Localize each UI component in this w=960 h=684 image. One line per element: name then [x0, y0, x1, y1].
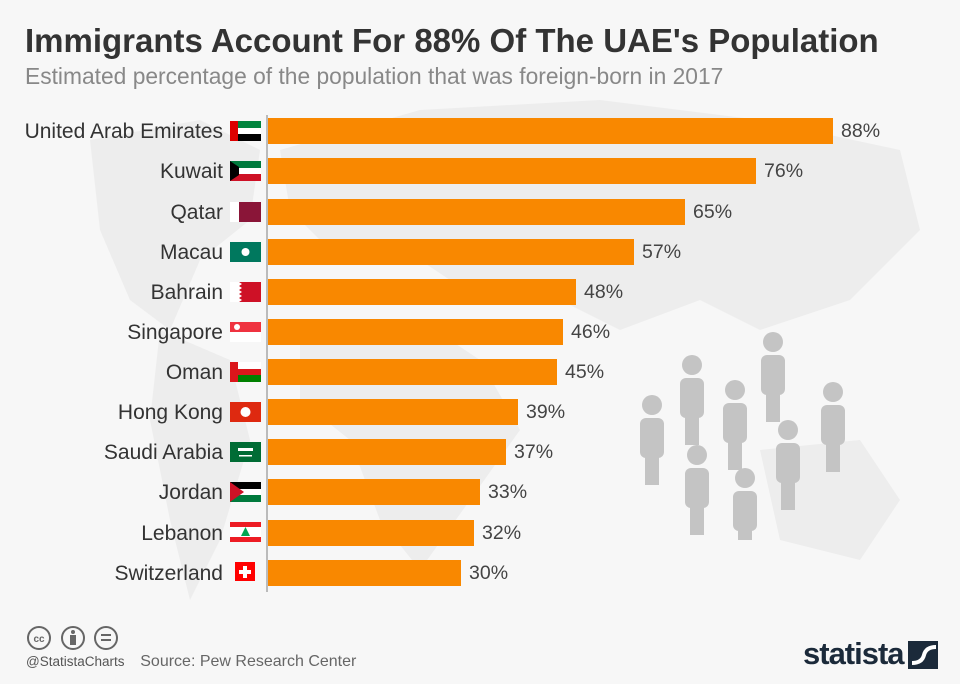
bar chart: Switzerland: [114, 562, 223, 585]
flags: [230, 121, 261, 581]
bar chart: 32%: [482, 522, 521, 544]
bar chart: Singapore: [127, 321, 223, 344]
bar chart: Saudi Arabia: [104, 441, 223, 464]
bar chart: 48%: [584, 281, 623, 303]
logo: statista: statista: [803, 636, 904, 671]
title: Immigrants Account For 88% Of The UAE's Population: [25, 22, 879, 59]
bar chart: Hong Kong: [118, 401, 223, 424]
axis line: [266, 115, 268, 592]
bar chart: 88%: [841, 120, 880, 142]
subtitle: Estimated percentage of the population that was foreign-born in 2017: [25, 63, 723, 89]
bar chart: 37%: [514, 441, 553, 463]
bar chart: 30%: [469, 562, 508, 584]
bar chart: Oman: [166, 361, 223, 384]
icons: creative commons: cc: [33, 634, 45, 645]
bar chart: Lebanon: [141, 522, 223, 545]
bar chart: 76%: [764, 160, 803, 182]
bar chart: Qatar: [170, 201, 223, 224]
bar chart: Jordan: [159, 481, 223, 504]
bar chart: 45%: [565, 361, 604, 383]
bar chart: Kuwait: [160, 160, 223, 183]
bar chart: 33%: [488, 481, 527, 503]
icons: creative commons: [27, 626, 118, 650]
bar chart: 39%: [526, 401, 565, 423]
people icons: [640, 332, 845, 540]
bar chart: Macau: [160, 241, 223, 264]
bar chart: United Arab Emirates: [25, 120, 223, 143]
bar chart: 57%: [642, 241, 681, 263]
footer credits: @StatistaCharts Source: Pew Research Center: [26, 653, 356, 670]
bar chart: 46%: [571, 321, 610, 343]
bar chart: 65%: [693, 201, 732, 223]
bar chart: Bahrain: [151, 281, 223, 304]
